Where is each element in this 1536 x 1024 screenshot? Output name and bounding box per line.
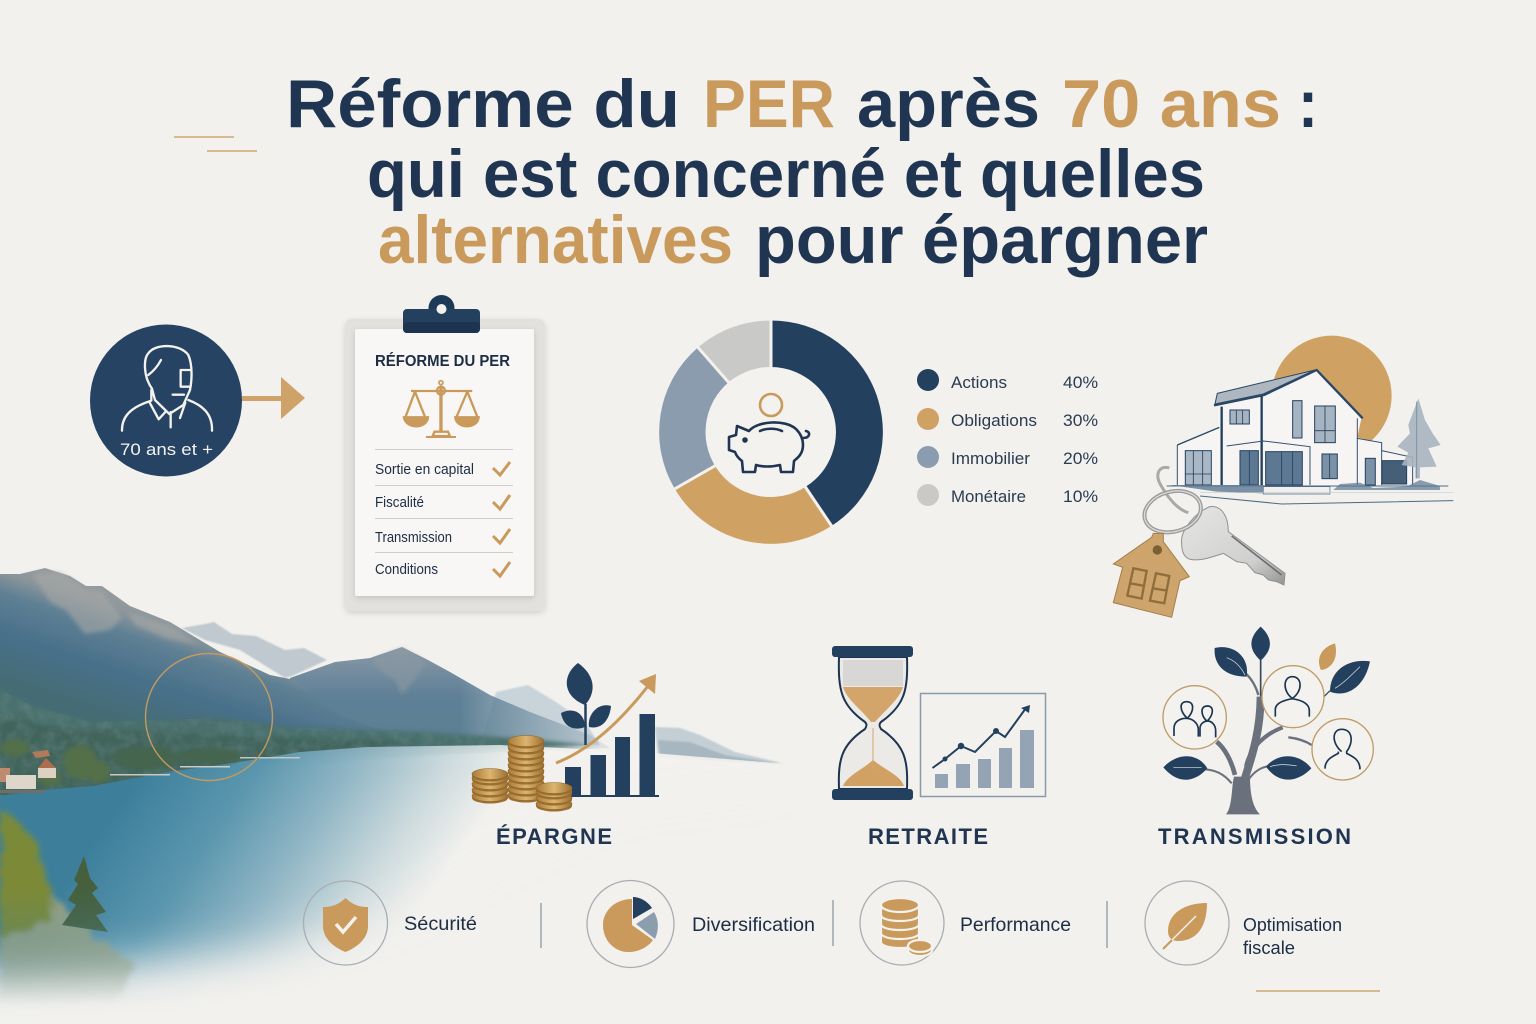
coin stacks xyxy=(472,736,572,812)
badge: 70 ans et +: 70 ans et + xyxy=(120,440,213,459)
bar chart xyxy=(565,714,659,797)
icon: shield xyxy=(323,898,368,952)
title: Réforme du xyxy=(286,66,680,142)
icon: leaf xyxy=(1163,903,1207,949)
title: 70 ans xyxy=(1062,66,1281,142)
rock face on right mountain xyxy=(372,648,426,695)
benefit: Optimisation fiscale: Optimisation xyxy=(1243,915,1342,935)
checklist: Sortie en capital xyxy=(375,462,474,478)
tree sketch xyxy=(1397,398,1441,478)
heading: RETRAITE xyxy=(868,824,988,849)
icon: person outline xyxy=(122,346,212,431)
plant xyxy=(561,663,611,745)
illustration: retraite xyxy=(832,646,1046,849)
benefit: Sécurité xyxy=(304,881,477,965)
title: qui est concerné et quelles xyxy=(367,136,1205,212)
title: alternatives xyxy=(378,202,733,278)
benefit: Diversification: Diversification xyxy=(692,914,815,936)
separator xyxy=(832,900,834,946)
checklist: Conditions xyxy=(375,562,438,578)
shrubs xyxy=(1333,480,1440,490)
checklist: Fiscalité xyxy=(375,495,424,511)
benefit: Performance xyxy=(860,881,1071,965)
checklist xyxy=(375,450,513,578)
foreground trees xyxy=(0,812,135,1010)
leaves xyxy=(1163,627,1370,780)
legend: Monétaire: Monétaire xyxy=(951,488,1026,506)
shoreline forest and village xyxy=(0,740,300,793)
house keychain xyxy=(1113,533,1189,617)
clipboard heading: RÉFORME DU PER xyxy=(375,353,510,370)
illustration: house with sun and keys xyxy=(1113,336,1453,617)
forest on the slopes xyxy=(0,690,590,800)
trunk and branches xyxy=(1205,660,1330,813)
main mountain xyxy=(0,568,420,795)
hourglass xyxy=(832,646,913,800)
legend: Monétaire: 10% xyxy=(1063,488,1098,506)
benefit: Optimisation fiscale: fiscale xyxy=(1243,938,1295,958)
donut chart xyxy=(671,318,859,528)
badge: 70 ans et + xyxy=(90,324,242,476)
benefit: Sécurité: Sécurité xyxy=(404,913,477,935)
title: PER xyxy=(703,66,835,142)
decorative gold line bottom-right xyxy=(1256,990,1380,992)
clip xyxy=(403,295,480,333)
legend: Actions: 40% xyxy=(1063,374,1098,392)
growth arrow xyxy=(556,674,656,763)
legend: Immobilier xyxy=(917,446,1098,468)
icon: pie chart xyxy=(603,897,658,952)
heading: TRANSMISSION xyxy=(1158,824,1351,849)
far hills on the right xyxy=(480,685,782,764)
illustration: épargne xyxy=(472,663,659,849)
legend xyxy=(917,369,1098,506)
landscape: mountains and lake xyxy=(0,568,800,1024)
legend: Actions xyxy=(917,369,1098,392)
panel: clipboard xyxy=(345,295,545,611)
sun xyxy=(1272,336,1392,456)
arrow xyxy=(242,377,305,419)
legend: Monétaire xyxy=(917,484,1098,506)
legend: Immobilier: Immobilier xyxy=(951,450,1031,468)
icon: scales xyxy=(404,381,479,437)
house xyxy=(1167,369,1453,504)
illustration: transmission tree xyxy=(1158,627,1373,849)
legend: Obligations: 30% xyxy=(1063,412,1098,430)
legend: Obligations xyxy=(917,408,1098,430)
benefit: Diversification xyxy=(587,880,815,968)
heading: ÉPARGNE xyxy=(496,824,612,849)
icon: coin stack xyxy=(881,898,932,956)
checklist: Transmission xyxy=(375,530,452,546)
title: après xyxy=(857,66,1040,142)
separator xyxy=(540,903,542,948)
benefit: Optimisation fiscale xyxy=(1145,881,1342,965)
benefit: Performance: Performance xyxy=(960,914,1071,936)
title: pour épargner xyxy=(755,202,1208,278)
icon: piggy bank with coin xyxy=(729,394,809,472)
mini chart xyxy=(920,694,1046,796)
legend: Immobilier: 20% xyxy=(1063,450,1098,468)
keyring xyxy=(1140,467,1206,538)
gold ring over mountain xyxy=(146,654,272,780)
key xyxy=(1182,506,1285,585)
lake xyxy=(0,745,780,1003)
separator xyxy=(1106,901,1108,948)
decorative gold lines top-left xyxy=(174,137,257,151)
circles with people xyxy=(1163,666,1373,780)
snowy distant peak xyxy=(182,622,327,678)
title xyxy=(286,66,1318,278)
title: : xyxy=(1298,66,1318,142)
legend: Actions: Actions xyxy=(951,374,1007,392)
right mountain xyxy=(290,647,610,760)
legend: Obligations: Obligations xyxy=(951,412,1037,430)
